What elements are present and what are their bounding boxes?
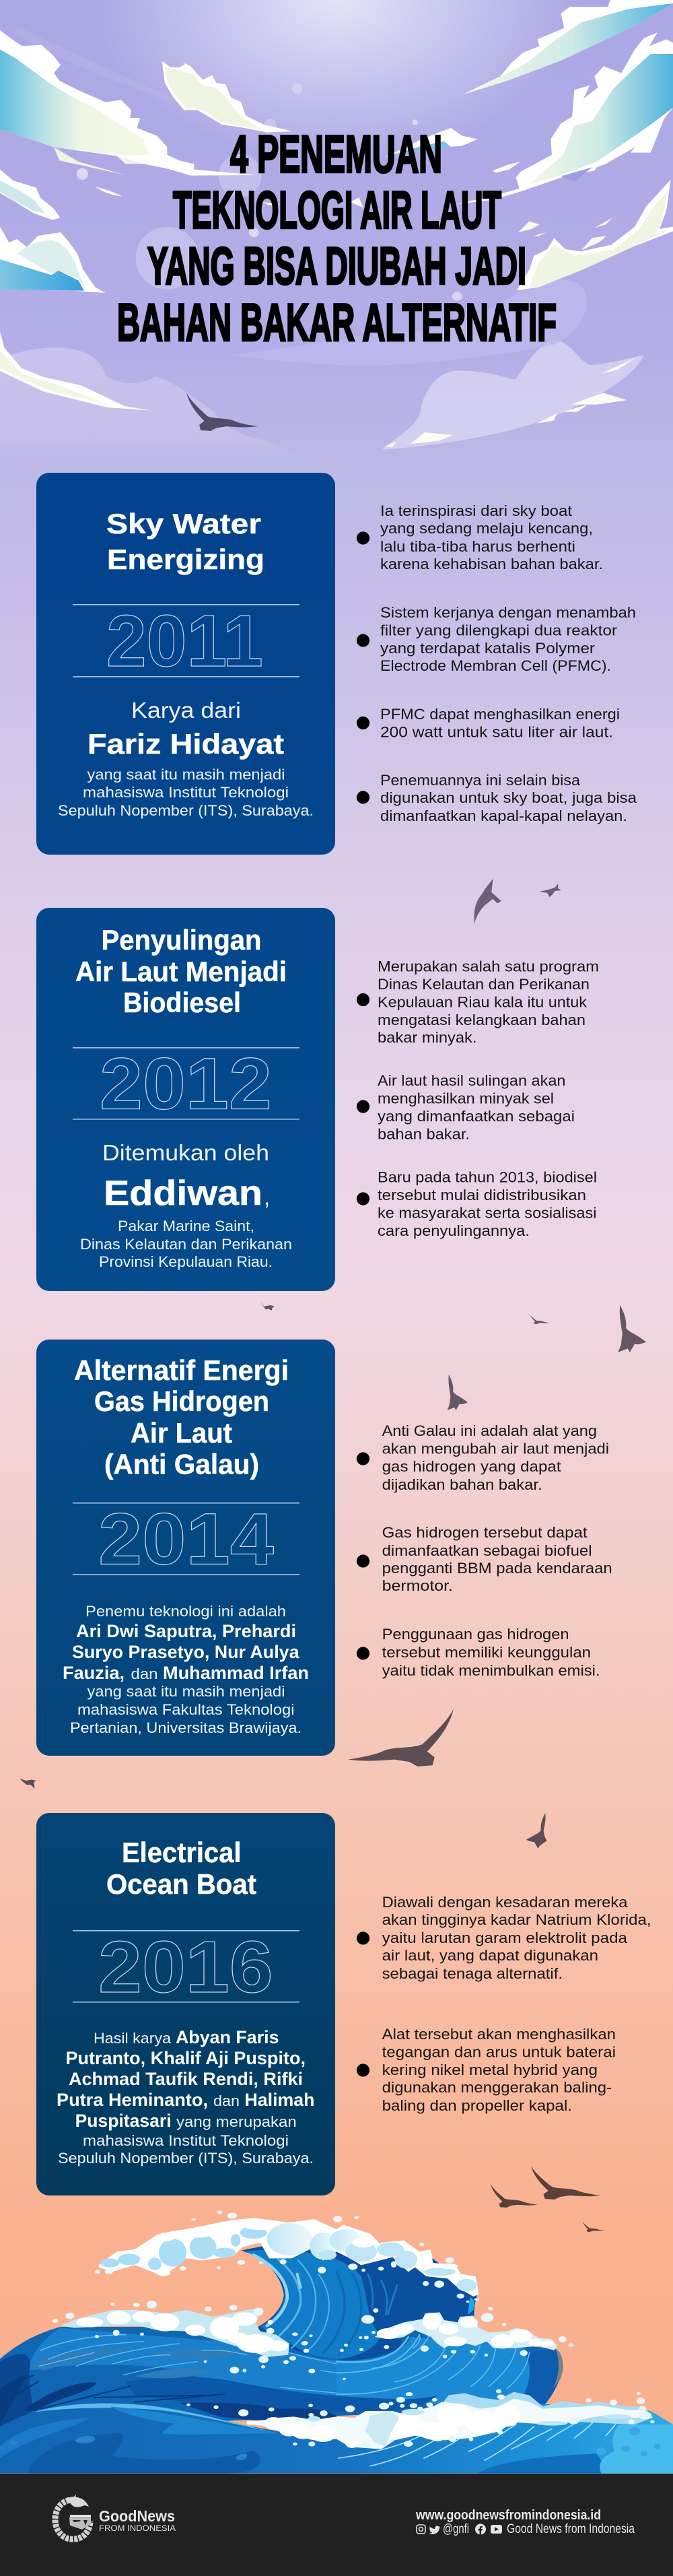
panel: Alternatif Energi Gas Hidrogen card: (Anti Galau) xyxy=(104,1448,259,1480)
text block: Anti Galau facts: dijadikan bahan bakar. xyxy=(382,1476,542,1493)
foam: right crest xyxy=(375,2312,557,2350)
panel: Electrical Ocean Boat card: Electrical xyxy=(122,1837,241,1868)
text block: Anti Galau facts: Penggunaan gas hidrogen xyxy=(382,1626,569,1643)
text block: Electrical Ocean Boat facts: baling dan propeller kapal. xyxy=(382,2097,572,2114)
website and social handles: Good News from Indonesia xyxy=(507,2522,635,2536)
panel: Sky Water Energizing card: 2011 xyxy=(106,600,263,682)
title xyxy=(117,124,557,352)
text block: Sky Water facts: lalu tiba-tiba harus berhenti xyxy=(380,538,575,555)
text block: Sky Water facts: Sistem kerjanya dengan menambah xyxy=(380,604,636,621)
text block: Sky Water facts: filter yang dilengkapi dua reaktor xyxy=(380,622,617,638)
panel: Sky Water Energizing card: Energizing xyxy=(107,543,264,575)
icon: facebook xyxy=(475,2524,486,2535)
foam: bottom crest xyxy=(247,2392,653,2449)
text block: Anti Galau facts: Anti Galau ini adalah alat yang xyxy=(382,1422,597,1439)
text block: Sky Water facts: PFMC dapat menghasilkan energi xyxy=(380,706,620,723)
text block: Sky Water facts: dimanfaatkan kapal-kapal nelayan. xyxy=(380,807,627,824)
panel: Alternatif Energi Gas Hidrogen card: Penemu teknologi ini adalah xyxy=(85,1603,286,1620)
title: 4 PENEMUAN xyxy=(230,124,442,183)
panel: Sky Water Energizing card: Sky Water xyxy=(106,508,261,539)
text block: Penyulingan facts: menghasilkan minyak sel xyxy=(378,1090,554,1107)
icon: bird under title xyxy=(186,393,258,431)
text block: Anti Galau facts: akan mengubah air laut menjadi xyxy=(382,1441,609,1457)
panel: Sky Water Energizing card: mahasiswa Institut Teknologi xyxy=(83,784,289,801)
text block: Penyulingan facts: Air laut hasil sulingan akan xyxy=(378,1072,565,1089)
text block: Anti Galau facts xyxy=(357,1422,612,1679)
text block: Penyulingan facts: bahan bakar. xyxy=(378,1126,470,1142)
panel: Electrical Ocean Boat card: Putra Heminanto, xyxy=(57,2090,208,2110)
icon: birds above wave xyxy=(491,2166,604,2232)
icon: instagram xyxy=(417,2525,425,2534)
panel: Penyulingan Air Laut card: Provinsi Kepulauan Riau. xyxy=(99,1253,273,1270)
panel: Alternatif Energi Gas Hidrogen card: Fauzia, xyxy=(63,1663,125,1683)
text block: Penyulingan facts: Dinas Kelautan dan Perikanan xyxy=(378,976,590,993)
logo wordmark xyxy=(99,2507,176,2533)
panel: Sky Water Energizing card: yang saat itu masih menjadi xyxy=(87,766,285,783)
background ghost clouds xyxy=(0,279,644,467)
panel: Electrical Ocean Boat card: dan xyxy=(213,2092,240,2109)
panel: Electrical Ocean Boat card: mahasiswa Institut Teknologi xyxy=(83,2132,289,2149)
text block: Sky Water facts: 200 watt untuk satu liter air laut. xyxy=(380,723,613,741)
panel: Alternatif Energi Gas Hidrogen card: Pertanian, Universitas Brawijaya. xyxy=(70,1719,302,1736)
text block: Electrical Ocean Boat facts: air laut, yang dapat digunakan xyxy=(382,1947,598,1964)
panel: Electrical Ocean Boat card: Halimah xyxy=(245,2090,315,2110)
text block: Sky Water facts: Penemuannya ini selain bisa xyxy=(380,772,581,789)
logo wordmark: FROM INDONESIA xyxy=(99,2525,176,2533)
text block: Penyulingan facts: cara penyulingannya. xyxy=(378,1222,530,1239)
clouds upper right xyxy=(262,0,673,290)
text block: Anti Galau facts: dimanfaatkan sebagai biofuel xyxy=(382,1542,592,1559)
clouds lower left and lower right xyxy=(0,292,635,447)
text block: Electrical Ocean Boat facts: yaitu larutan garam elektrolit pada xyxy=(382,1929,628,1946)
panel: Penyulingan Air Laut card: Pakar Marine Saint, xyxy=(118,1218,254,1234)
panel: Electrical Ocean Boat card: yang merupakan xyxy=(176,2113,297,2130)
panel: Alternatif Energi Gas Hidrogen card: yang saat itu masih menjadi xyxy=(87,1683,285,1700)
panel: Alternatif Energi Gas Hidrogen card: Air Laut xyxy=(131,1417,232,1449)
panel: Penyulingan Air Laut card xyxy=(36,908,335,1291)
panel: Penyulingan Air Laut card: 2012 xyxy=(100,1043,272,1125)
text block: Penyulingan facts: Kepulauan Riau kala itu untuk xyxy=(378,994,588,1010)
panel: Sky Water Energizing card: Karya dari xyxy=(131,698,241,723)
text block: Penyulingan facts: ke masyarakat serta sosialisasi xyxy=(378,1204,596,1222)
text block: Anti Galau facts: bermotor. xyxy=(382,1577,453,1594)
panel: Sky Water Energizing card: Sepuluh Nopember (ITS), Surabaya. xyxy=(58,802,314,819)
icon: birds between third and fourth sections xyxy=(20,1709,546,1849)
text block: Anti Galau facts: pengganti BBM pada kendaraan xyxy=(382,1560,612,1577)
website and social handles: www.goodnewsfromindonesia.id xyxy=(415,2508,601,2523)
text block: Penyulingan facts: tersebut mulai didistribusikan xyxy=(378,1187,586,1203)
logo wordmark: GoodNews xyxy=(99,2507,175,2525)
panel: Electrical Ocean Boat card: Hasil karya xyxy=(94,2030,172,2047)
panel: Alternatif Energi Gas Hidrogen card: Alternatif Energi xyxy=(74,1354,289,1386)
panel: Alternatif Energi Gas Hidrogen card xyxy=(36,1340,335,1756)
panel: Penyulingan Air Laut card: Eddiwan xyxy=(104,1174,262,1213)
text block: Electrical Ocean Boat facts: kering nikel metal hybrid yang xyxy=(382,2061,598,2078)
panel: Electrical Ocean Boat card: Puspitasari xyxy=(75,2111,172,2131)
panel: Electrical Ocean Boat card xyxy=(36,1813,335,2195)
text block: Sky Water facts: Electrode Membran Cell (PFMC). xyxy=(380,657,611,674)
foam: spray droplets xyxy=(52,2210,655,2447)
panel: Alternatif Energi Gas Hidrogen card: Muhammad Irfan xyxy=(163,1663,309,1683)
text block: Penyulingan facts xyxy=(357,958,599,1239)
text block: Anti Galau facts: Gas hidrogen tersebut dapat xyxy=(382,1524,588,1541)
text block: Penyulingan facts: bakar minyak. xyxy=(378,1029,476,1046)
illustration: ocean wave xyxy=(0,2210,673,2474)
foam: left crest xyxy=(61,2308,289,2357)
text block: Anti Galau facts: yaitu tidak menimbulkan emisi. xyxy=(382,1662,600,1679)
text block: Electrical Ocean Boat facts: sebagai tenaga alternatif. xyxy=(382,1965,563,1982)
text block: Sky Water facts: digunakan untuk sky boat, juga bisa xyxy=(380,789,637,806)
text block: Penyulingan facts: Merupakan salah satu program xyxy=(378,958,599,975)
text block: Anti Galau facts: gas hidrogen yang dapat xyxy=(382,1458,561,1475)
panel: Penyulingan Air Laut card: Ditemukan oleh xyxy=(102,1140,269,1165)
footer bar xyxy=(0,2474,673,2576)
text block: Anti Galau facts: tersebut memiliki keunggulan xyxy=(382,1644,591,1661)
website and social handles xyxy=(415,2508,635,2536)
panel: Alternatif Energi Gas Hidrogen card: dan xyxy=(131,1665,157,1682)
icon: youtube xyxy=(491,2525,502,2534)
panel: Penyulingan Air Laut card: Penyulingan xyxy=(101,924,261,956)
panel: Alternatif Energi Gas Hidrogen card: 2014 xyxy=(98,1498,274,1580)
text block: Sky Water facts: karena kehabisan bahan bakar. xyxy=(380,556,603,572)
panel: Alternatif Energi Gas Hidrogen card: Gas Hidrogen xyxy=(94,1385,269,1417)
text block: Sky Water facts: Ia terinspirasi dari sky boat xyxy=(380,502,572,519)
website and social handles: @gnfi xyxy=(443,2522,469,2536)
panel: Penyulingan Air Laut card: Air Laut Menjadi xyxy=(75,956,287,987)
icon: twitter xyxy=(429,2526,440,2534)
panel: Electrical Ocean Boat card: Achmad Taufik Rendi, Rifki xyxy=(69,2069,303,2089)
panel: Sky Water Energizing card: Fariz Hidayat xyxy=(87,728,284,760)
clouds upper left xyxy=(0,27,302,293)
panel: Penyulingan Air Laut card: , xyxy=(264,1185,270,1210)
panel: Alternatif Energi Gas Hidrogen card: mahasiswa Fakultas Teknologi xyxy=(77,1701,295,1718)
text block: Penyulingan facts: mengatasi kelangkaan bahan xyxy=(378,1012,586,1028)
panel: Penyulingan Air Laut card: Dinas Kelautan dan Perikanan xyxy=(80,1236,292,1253)
panel: Sky Water Energizing card xyxy=(36,473,335,855)
text block: Electrical Ocean Boat facts xyxy=(357,1894,651,2114)
panel: Alternatif Energi Gas Hidrogen card: Ari Dwi Saputra, Prehardi xyxy=(76,1621,296,1641)
text block: Penyulingan facts: Baru pada tahun 2013, biodisel xyxy=(378,1169,597,1185)
panel: Electrical Ocean Boat card: 2016 xyxy=(98,1926,273,2008)
logo: GoodNews from Indonesia xyxy=(55,2495,91,2539)
text block: Electrical Ocean Boat facts: Alat tersebut akan menghasilkan xyxy=(382,2026,616,2043)
panel: Electrical Ocean Boat card: Sepuluh Nopember (ITS), Surabaya. xyxy=(58,2150,314,2167)
panel: Electrical Ocean Boat card: Ocean Boat xyxy=(106,1868,256,1900)
panel: Penyulingan Air Laut card: Biodiesel xyxy=(123,987,241,1018)
text block: Penyulingan facts: yang dimanfaatkan sebagai xyxy=(378,1108,575,1125)
text block: Electrical Ocean Boat facts: Diawali dengan kesadaran mereka xyxy=(382,1894,628,1911)
panel: Electrical Ocean Boat card: Abyan Faris xyxy=(176,2027,279,2047)
icon: birds between second and third sections xyxy=(260,1300,646,1410)
text block: Electrical Ocean Boat facts: tegangan dan arus untuk baterai xyxy=(382,2043,616,2061)
text block: Electrical Ocean Boat facts: akan tingginya kadar Natrium Klorida, xyxy=(382,1911,651,1928)
text block: Electrical Ocean Boat facts: digunakan menggerakan baling- xyxy=(382,2079,612,2096)
foam: top crest xyxy=(99,2218,479,2297)
text block: Sky Water facts: yang terdapat katalis Polymer xyxy=(380,640,595,657)
text block: Sky Water facts xyxy=(357,502,637,824)
text block: Sky Water facts: yang sedang melaju kencang, xyxy=(380,520,593,537)
panel: Electrical Ocean Boat card: Putranto, Khalif Aji Puspito, xyxy=(66,2048,306,2068)
icon: birds above second section xyxy=(474,879,561,923)
panel: Alternatif Energi Gas Hidrogen card: Suryo Prasetyo, Nur Aulya xyxy=(72,1642,299,1662)
